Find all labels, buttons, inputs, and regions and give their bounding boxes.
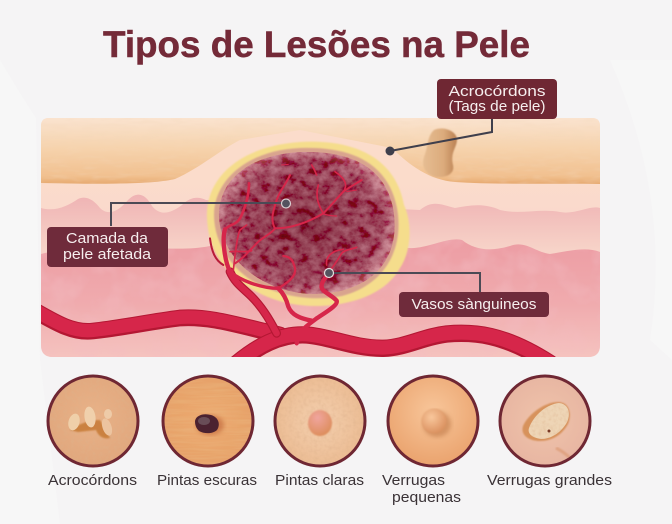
label: Pintas claras [275,473,364,489]
icon: light mole [275,376,365,466]
callout: camada da pele afetada: Camada da [66,231,149,247]
item: verrugas pequenas: pequenas [392,490,461,506]
lesion yellow halo [207,142,410,306]
blood vessels [33,164,550,365]
lesion shading [219,152,395,294]
leader line: vasos sanguíneos [324,268,480,292]
callout: camada da pele afetada [47,227,168,267]
left artery [33,309,280,335]
icon: large wart [500,376,590,466]
icon: small wart [388,376,478,466]
callout: vasos sanguíneos [399,292,549,317]
label: Pintas escuras [157,473,257,489]
lesion body [219,152,395,294]
item: pintas claras [275,376,365,489]
branching vessels [210,164,362,343]
leader line: acrocórdons [386,119,492,156]
lesion pale rim [214,148,399,298]
callout: camada da pele afetada: pele afetada [63,247,152,263]
callout: acrocórdons: Acrocórdons [448,84,546,100]
item: acrocórdons [48,376,138,489]
leader line: camada da pele afetada [111,199,290,226]
right artery [235,333,550,365]
panel: skin cross-section [33,118,600,365]
callout: acrocórdons: (Tags de pele) [448,99,546,115]
callout: vasos sanguíneos: Vasos sànguineos [412,297,536,313]
label: Verrugas grandes [487,473,612,489]
item: verrugas grandes [487,376,612,489]
item: verrugas pequenas [382,376,478,506]
deep pink wavy layer [41,239,600,357]
epidermis tan layer [41,118,600,184]
title: Tipos de Lesões na Pele [103,24,530,65]
acrochordon skin tag [423,128,457,177]
label: Verrugas [382,473,445,489]
icon: skin tags [48,376,138,466]
label: Acrocórdons [48,473,137,489]
upper pink wavy layer [41,194,600,242]
item: pintas escuras [157,376,257,489]
callout: acrocórdons [437,79,557,119]
pale dermis base [41,118,600,357]
icon: dark mole [163,376,253,466]
